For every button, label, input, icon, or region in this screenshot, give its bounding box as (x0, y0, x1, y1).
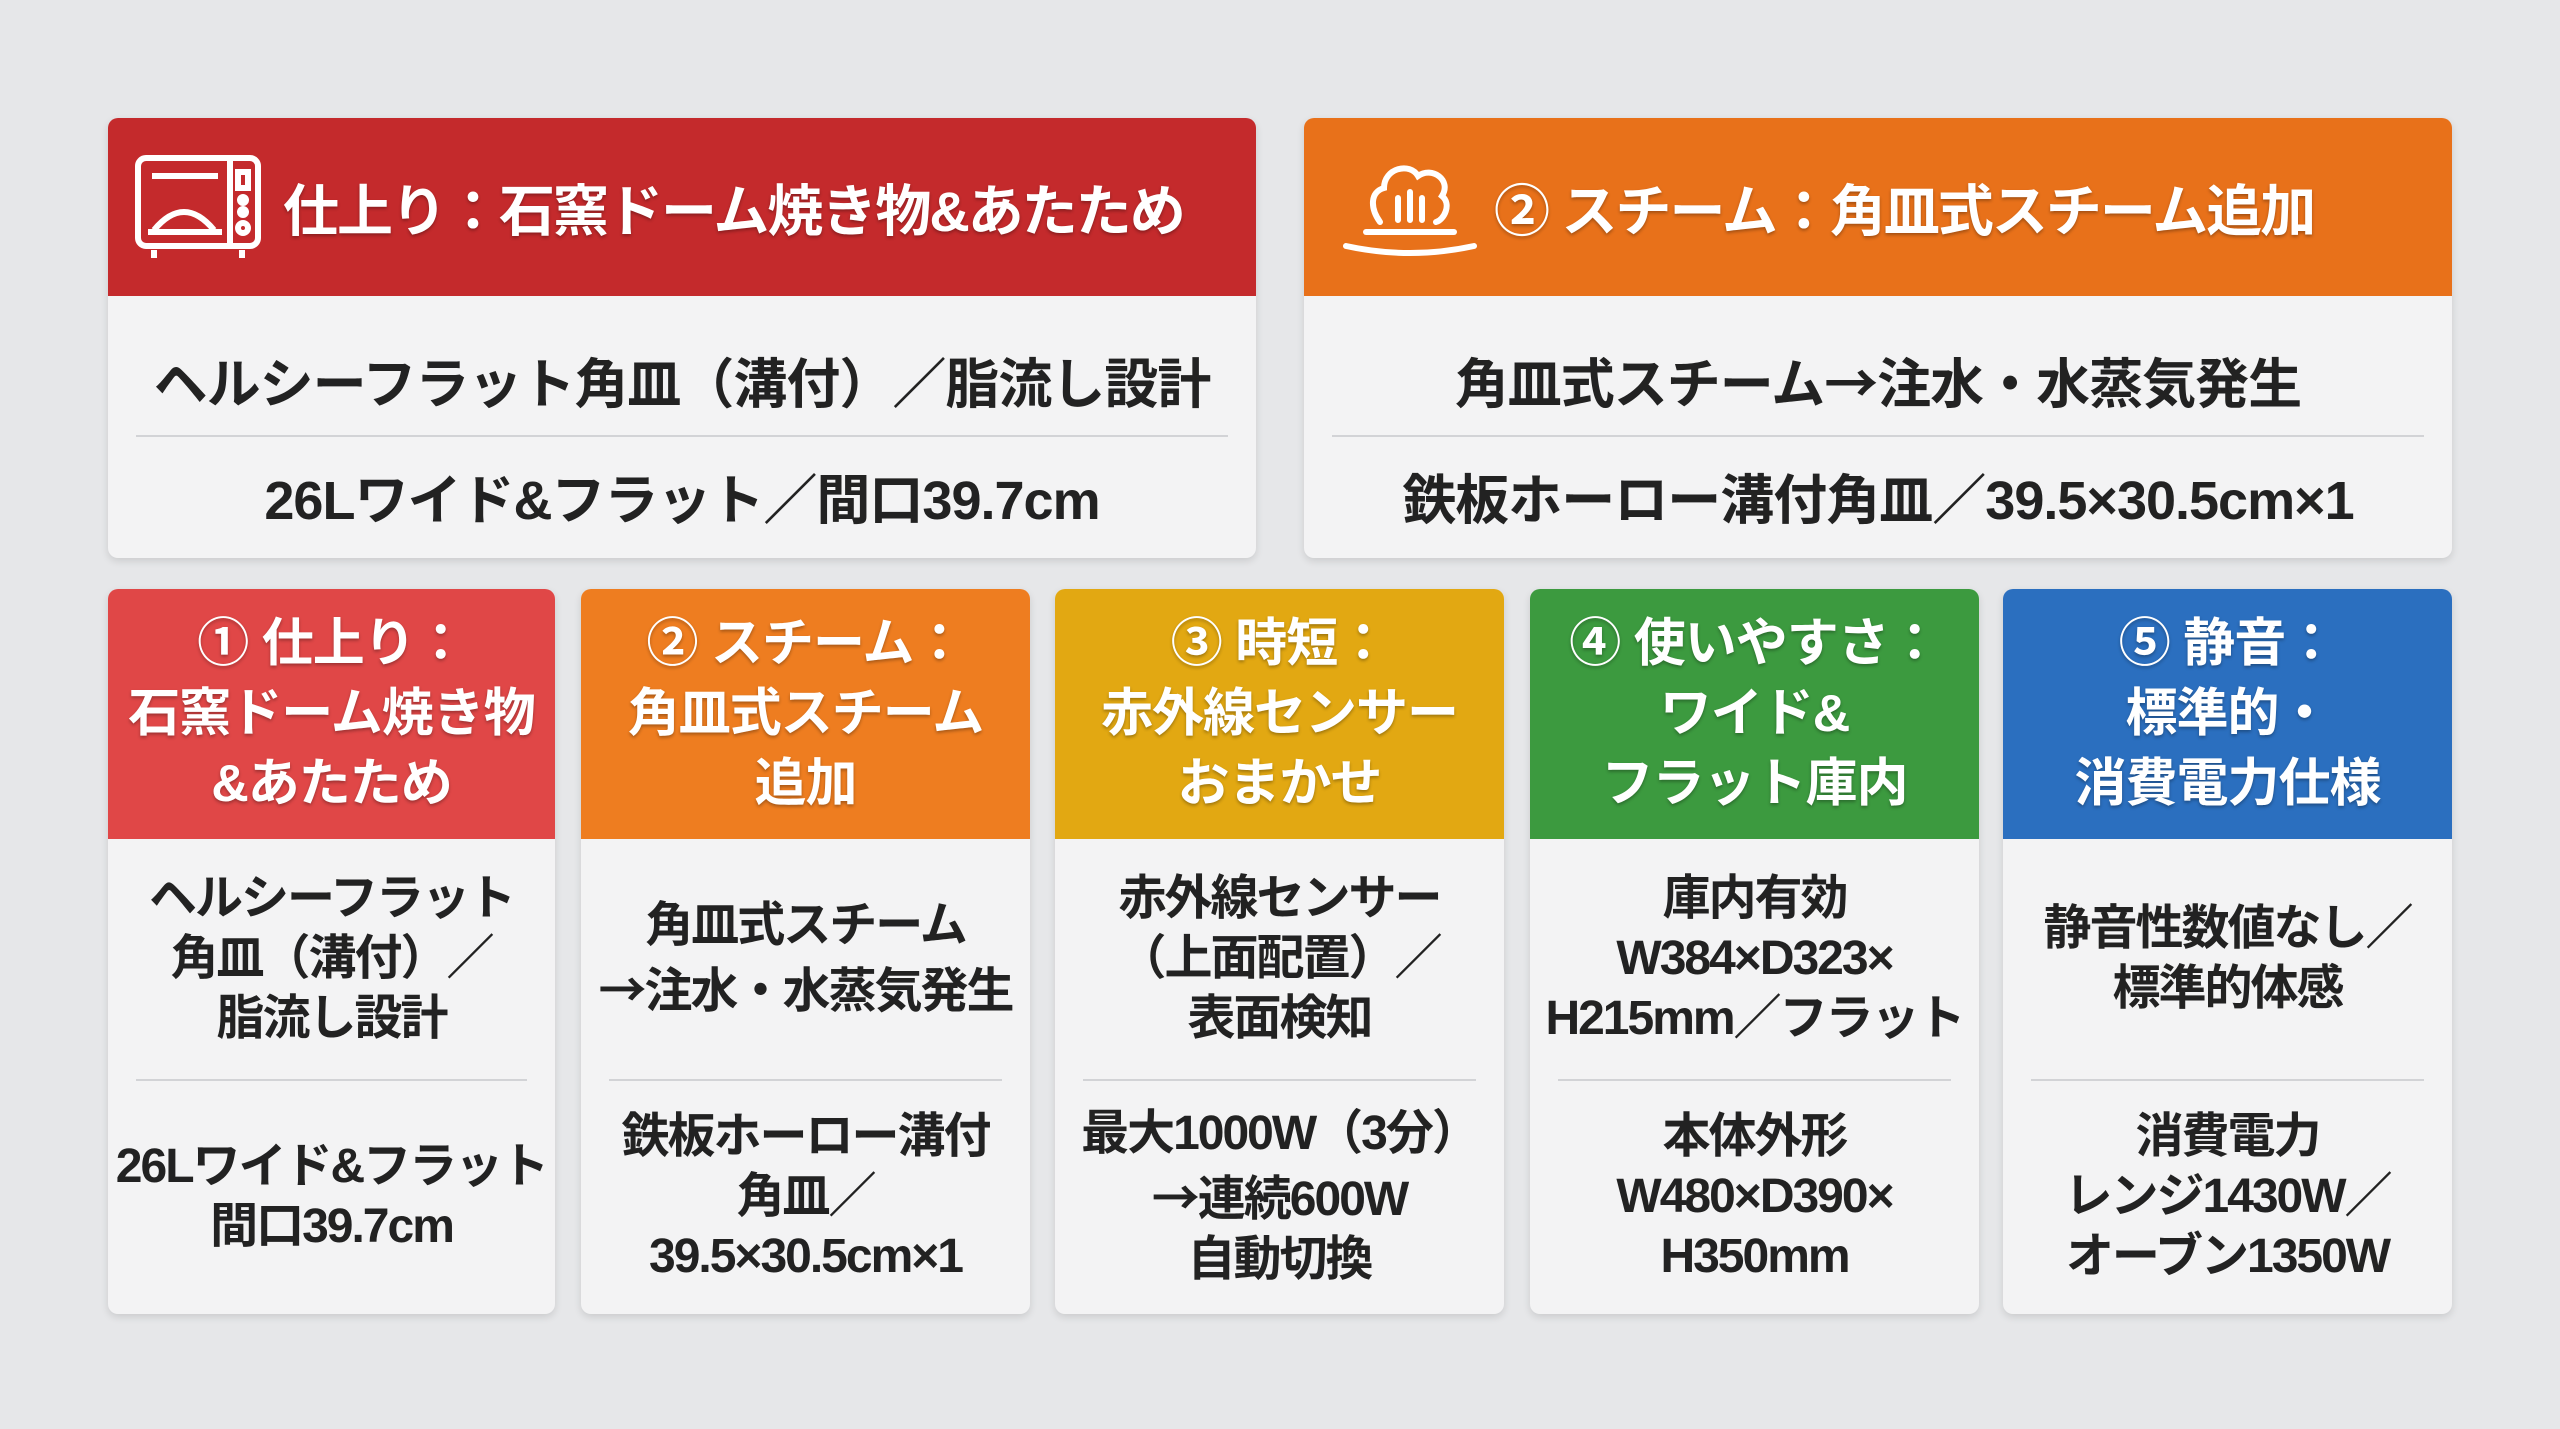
panel: finish (108, 589, 555, 1314)
header: finish (108, 118, 1256, 296)
body upper: 角皿式スチーム (645, 899, 966, 952)
header: ⑤ 静音： (2119, 615, 2336, 673)
body lower: 本体外形 (1662, 1110, 1846, 1162)
text: top left line 2: 26Lワイド&フラット／間口39.7cm (264, 470, 1100, 530)
body lower: レンジ1430W／ (2064, 1170, 2391, 1222)
body upper (2043, 902, 2412, 1015)
body upper (1545, 872, 1964, 1045)
header: &あたため (211, 755, 452, 813)
header: ④ 使いやすさ： (1569, 615, 1940, 673)
body upper: ヘルシーフラット (149, 872, 514, 925)
header: ③ 時短： (1171, 615, 1388, 673)
panel: steam (581, 589, 1030, 1314)
body upper: 表面検知 (1187, 992, 1372, 1045)
body upper: →注水・水蒸気発生 (598, 951, 1013, 1021)
body upper: 庫内有効 (1662, 872, 1846, 925)
header: おまかせ (1177, 755, 1382, 813)
icon: steam dish (1343, 165, 1477, 256)
body upper: 静音性数値なし／ (2043, 902, 2412, 955)
header (108, 589, 555, 839)
body lower: 角皿／ (736, 1170, 874, 1222)
body lower: W480×D390× (1616, 1170, 1893, 1222)
body lower (2064, 1110, 2392, 1282)
header: steam: ② スチーム：角皿式スチーム追加 (1494, 180, 2314, 242)
header: 標準的・ (2125, 685, 2330, 743)
text: top left line 1: ヘルシーフラット角皿（溝付）／脂流し設計 (154, 354, 1210, 414)
body lower: 39.5×30.5cm×1 (649, 1230, 962, 1282)
header: ① 仕上り： (197, 615, 466, 673)
panel: quiet (2003, 589, 2452, 1314)
body upper: W384×D323× (1616, 932, 1893, 985)
header: ② スチーム： (647, 615, 964, 673)
body upper: H215mm／フラット (1545, 992, 1964, 1045)
body lower: 鉄板ホーロー溝付 (621, 1110, 990, 1162)
body upper (149, 872, 514, 1045)
header: 消費電力仕様 (2074, 755, 2380, 813)
body upper: （上面配置）／ (1118, 932, 1440, 985)
header: ワイド& (1660, 685, 1849, 743)
body upper: 脂流し設計 (216, 992, 446, 1045)
text: top right line 2: 鉄板ホーロー溝付角皿／39.5×30.5cm×1 (1402, 470, 2354, 530)
body lower: オーブン1350W (2066, 1230, 2389, 1282)
body lower (1081, 1106, 1478, 1286)
text: top right line 1: 角皿式スチーム→注水・水蒸気発生 (1455, 340, 2301, 418)
header (1055, 589, 1504, 839)
body upper: 角皿（溝付）／ (170, 932, 492, 985)
body lower: 消費電力 (2135, 1110, 2320, 1162)
body lower: 最大1000W（3分） (1081, 1106, 1478, 1160)
body lower (1616, 1110, 1893, 1282)
body upper: 赤外線センサー (1118, 872, 1440, 925)
body upper (1118, 872, 1442, 1045)
body lower: H350mm (1660, 1230, 1849, 1282)
header: steam (1304, 118, 2452, 296)
panel: usability (1530, 589, 1979, 1314)
panel: top right (1304, 118, 2452, 558)
header: フラット庫内 (1601, 755, 1908, 813)
panel: top left (108, 118, 1256, 558)
header: 角皿式スチーム (628, 685, 983, 743)
body lower (116, 1140, 547, 1252)
header: 石窯ドーム焼き物 (128, 685, 535, 743)
header (1530, 589, 1979, 839)
header (581, 589, 1030, 839)
header (2003, 589, 2452, 839)
body lower (621, 1110, 990, 1282)
header: 追加 (754, 755, 856, 813)
header: 赤外線センサー (1101, 685, 1458, 743)
header: finish: 仕上り：石窯ドーム焼き物&あたため (283, 180, 1184, 242)
body lower: 間口39.7cm (210, 1200, 453, 1252)
body lower: 自動切換 (1187, 1232, 1372, 1286)
body lower: →連続600W (1152, 1158, 1407, 1228)
body lower: 26Lワイド&フラット (116, 1140, 547, 1192)
panel: time (1055, 589, 1504, 1314)
icon: microwave (135, 155, 261, 258)
body upper (598, 899, 1013, 1021)
body upper: 標準的体感 (2112, 962, 2342, 1015)
